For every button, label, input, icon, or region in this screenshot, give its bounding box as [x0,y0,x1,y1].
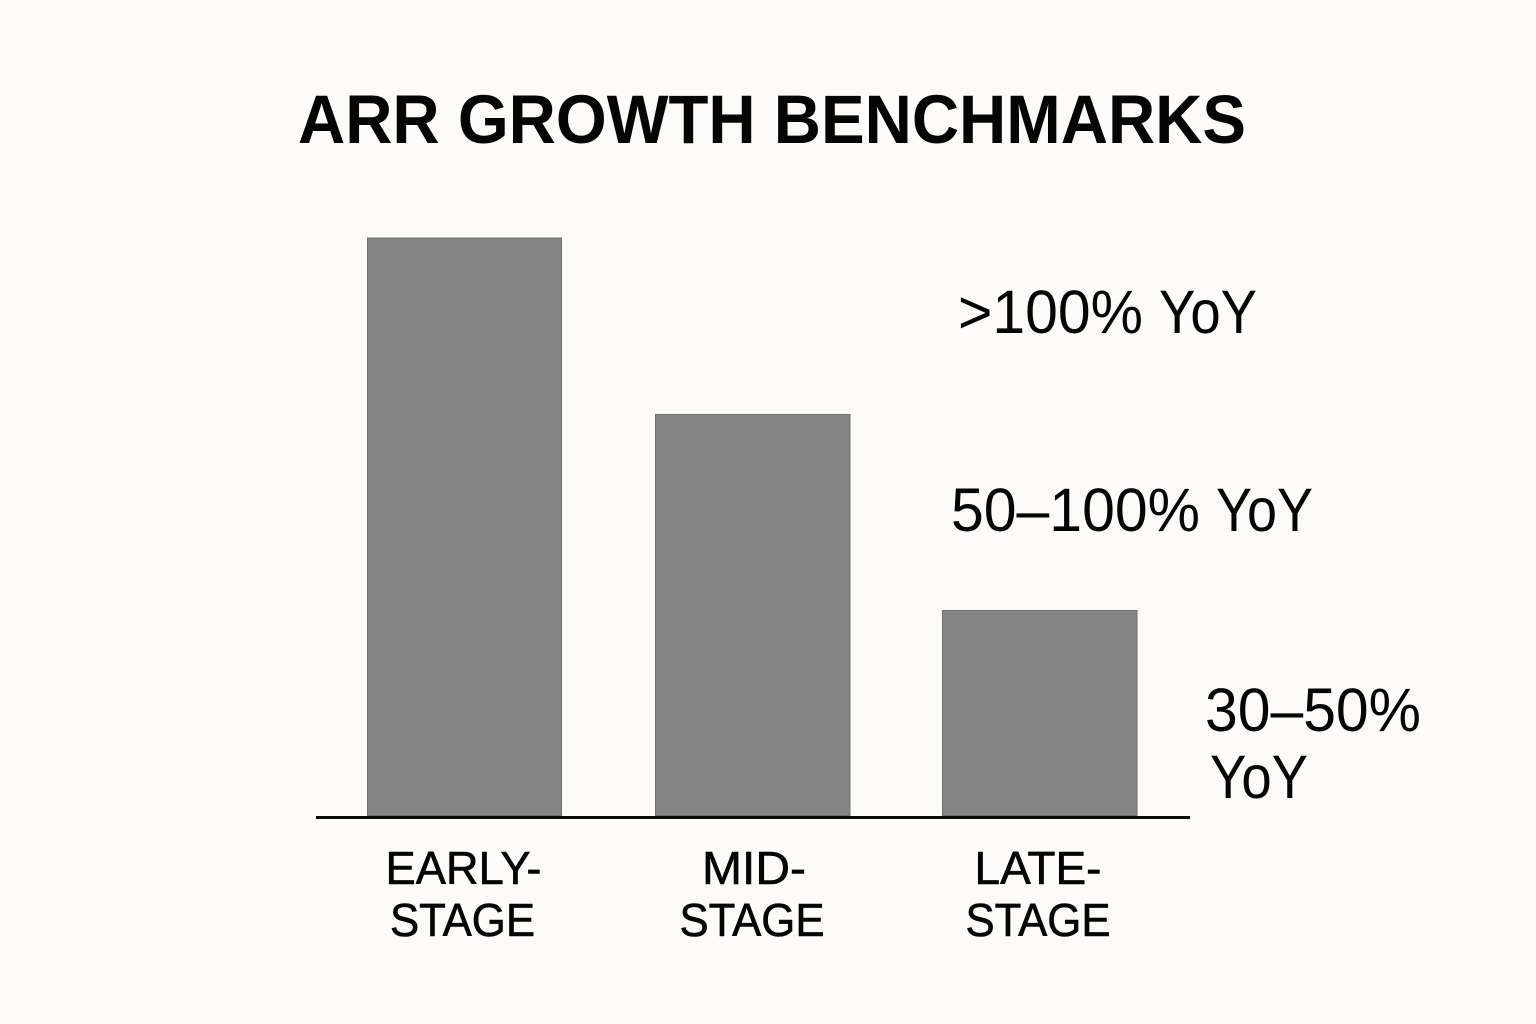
title: ARR GROWTH BENCHMARKS [298,81,1246,158]
bar chart [316,238,1190,819]
value label: mid-stage: YoY [1216,476,1313,544]
bar: early-stage [368,238,562,816]
category label: early-stage: EARLY- [386,842,542,894]
value label: late-stage: 30–50% [1205,676,1421,744]
axis baseline [316,816,1190,819]
category label: early-stage: STAGE [390,894,535,946]
category label: mid-stage [680,842,824,946]
value label: late-stage: YoY [1210,743,1308,811]
category label: early-stage [386,842,542,946]
category label: mid-stage: MID- [702,842,806,894]
value label: mid-stage: 50–100% [951,476,1200,544]
value label: early-stage: YoY [1159,278,1257,346]
value label: early-stage: >100% [958,278,1143,346]
value label: early-stage [958,278,1257,346]
category label: late-stage: STAGE [966,894,1110,946]
value label: late-stage [1205,676,1421,811]
category label: mid-stage: STAGE [680,894,824,946]
bar: late-stage [942,610,1137,816]
bar: mid-stage [656,414,850,816]
category label: late-stage [966,842,1110,946]
category label: late-stage: LATE- [974,842,1102,894]
